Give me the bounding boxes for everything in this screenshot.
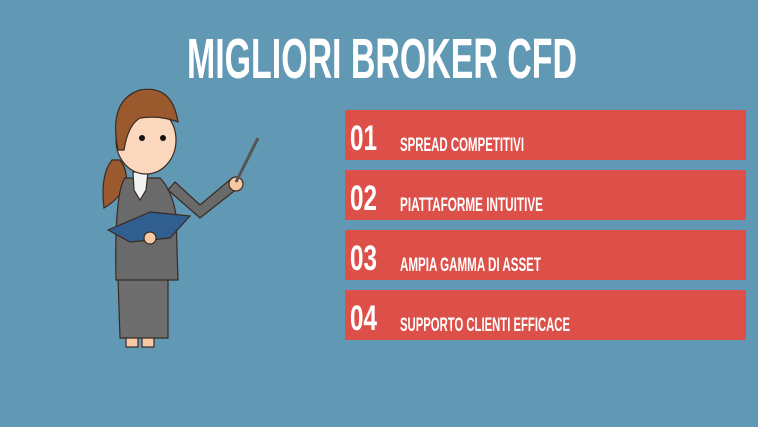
hand <box>229 177 243 191</box>
pointing arm <box>168 178 238 218</box>
item 3: 03 <box>350 239 377 278</box>
legs <box>126 330 138 347</box>
item 4: 04 <box>350 299 377 338</box>
pointer <box>236 138 258 182</box>
item 1: 01 <box>350 119 377 158</box>
item 2 <box>345 170 746 220</box>
skirt <box>118 278 168 338</box>
item 4: SUPPORTO CLIENTI EFFICACE <box>400 315 570 336</box>
neck/shirt <box>133 172 148 200</box>
item 1: SPREAD COMPETITIVI <box>400 135 524 156</box>
hair <box>116 89 178 150</box>
ponytail <box>103 160 126 208</box>
illustration: teacher woman with pointer <box>103 89 258 347</box>
item 2: 02 <box>350 179 377 218</box>
jacket <box>116 178 178 280</box>
item 4 <box>345 290 746 340</box>
book <box>108 212 190 242</box>
item 3: AMPIA GAMMA DI ASSET <box>400 255 541 276</box>
item 2: PIATTAFORME INTUITIVE <box>400 195 543 216</box>
item 3 <box>345 230 746 280</box>
face <box>116 106 176 174</box>
item 1 <box>345 110 746 160</box>
